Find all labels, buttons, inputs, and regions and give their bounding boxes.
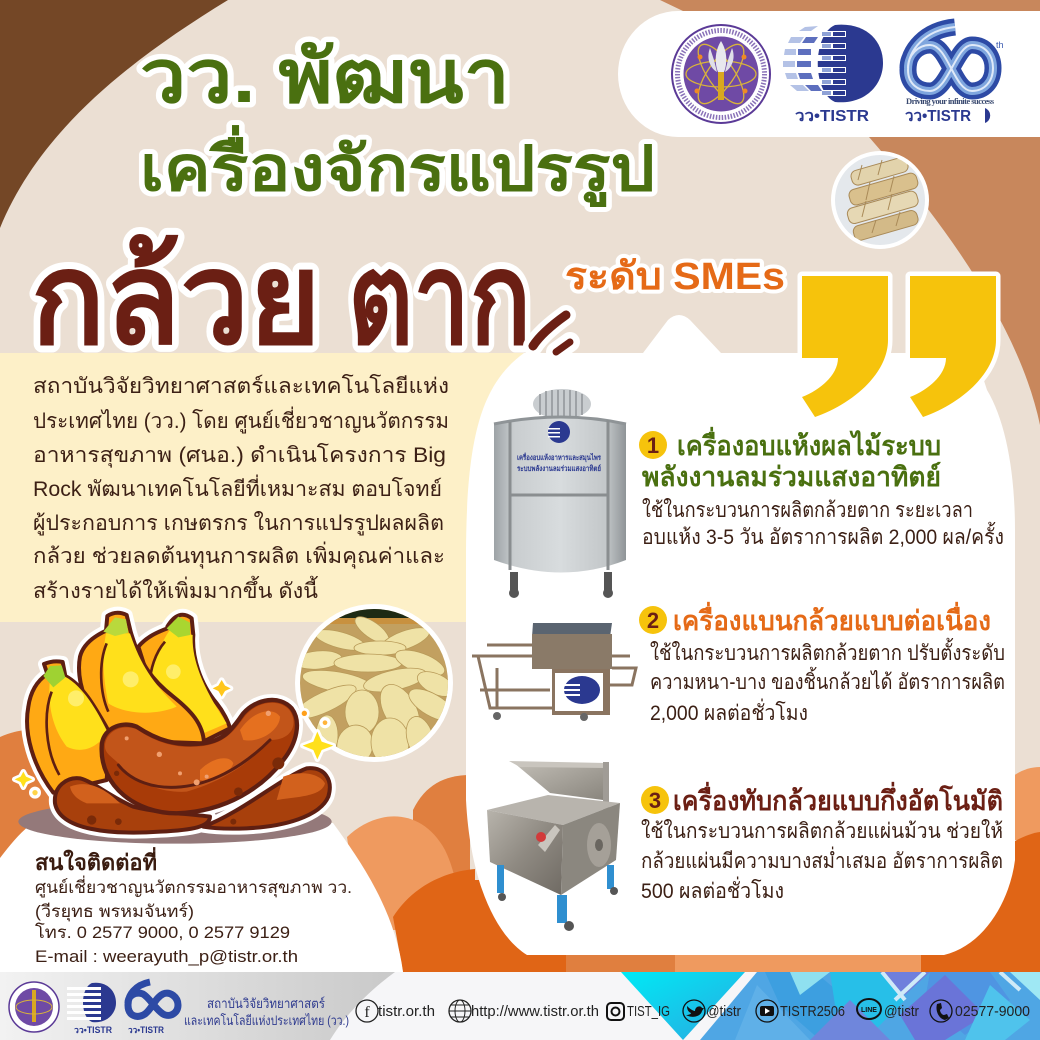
footer: website: http://www.tistr.or.th	[471, 1003, 599, 1020]
footer: line: LINE	[861, 1007, 877, 1014]
footer logo: 60th: วว•TISTR	[128, 1025, 164, 1035]
intro text: สถาบันวิจัยวิทยาศาสตร์และเทคโนโลยีแห่ง	[33, 374, 449, 398]
title main word: กล้วย	[31, 228, 321, 371]
footer logo: TISTR: วว•TISTR	[74, 1025, 112, 1035]
item 3 text: กล้วยแผ่นมีความบางสม่ำเสมอ อัตราการผลิต	[641, 846, 1003, 873]
title tail mark	[533, 315, 570, 352]
title line 1: วว. พัฒนา	[140, 35, 510, 118]
tan corner shape	[660, 0, 1040, 425]
item 2	[639, 601, 1005, 725]
white hill behind contact	[0, 823, 403, 972]
orange hills	[0, 730, 1040, 972]
badge 1: 1	[647, 433, 659, 458]
item 3	[641, 781, 1003, 903]
footer: twitter	[683, 1000, 741, 1022]
badge 1	[639, 431, 667, 459]
footer: line: @tistr	[884, 1003, 919, 1020]
footer: twitter: @tistr	[706, 1003, 741, 1020]
intro text: กล้วย ช่วยลดต้นทุนการผลิต เพิ่มคุณค่าและ	[33, 541, 445, 569]
illustration: bananas and dried bananas	[15, 613, 333, 844]
footer: facebook	[356, 1000, 435, 1022]
item 2 text	[650, 638, 1005, 725]
item 2 text: 2,000 ผลต่อชั่วโมง	[650, 698, 808, 725]
item 3 text	[641, 819, 1003, 903]
footer: website	[449, 1000, 599, 1022]
footer org name	[184, 996, 349, 1028]
contact block: (วีรยุทธ พรหมจันทร์)	[35, 902, 194, 922]
item 1	[639, 426, 1004, 549]
item 1 text	[642, 498, 1004, 549]
quote marks	[802, 276, 996, 417]
item 3 text: ใช้ในกระบวนการผลิตกล้วยแผ่นม้วน ช่วยให้	[641, 819, 1003, 843]
logo text: TISTR: วว•TISTR	[795, 108, 869, 125]
footer logo: seal	[9, 982, 59, 1032]
badge 2	[639, 606, 667, 634]
logo: ministry seal	[672, 25, 770, 123]
logo text: 60th: th	[996, 40, 1004, 50]
footer logo: 60th	[128, 982, 178, 1035]
main dried banana	[102, 700, 297, 813]
photo: dried bananas	[295, 604, 453, 762]
machine 1: solar dryer	[494, 389, 626, 598]
item 2 heading: เครื่องแบนกล้วยแบบต่อเนื่อง	[673, 601, 991, 636]
title main word	[31, 228, 531, 371]
intro text: ผู้ประกอบการ เกษตรกร ในการแปรรูปผลผลิต	[33, 511, 444, 536]
contact block: E-mail : weerayuth_p@tistr.or.th	[35, 947, 298, 966]
footer: line	[857, 999, 919, 1020]
logo icon: small disc	[985, 108, 990, 123]
brown corner shape	[0, 0, 228, 228]
footer: facebook: tistr.or.th	[378, 1003, 435, 1020]
title main word: ตาก	[348, 228, 531, 371]
intro text: อาหารสุขภาพ (ศนอ.) ดำเนินโครงการ Big	[33, 443, 446, 468]
white outline silhouette	[27, 613, 330, 833]
footer band	[0, 972, 1040, 1040]
machine 1: solar dryer: ระบบพลังงานลมร่วมแสงอาทิตย์	[517, 464, 601, 473]
logo panel	[618, 11, 1040, 137]
item 1 heading	[642, 426, 941, 492]
footer logo: TISTR	[67, 983, 116, 1035]
footer: phone	[930, 1000, 1030, 1022]
contact block	[35, 846, 352, 966]
badge 3: 3	[649, 788, 661, 813]
footer: youtube	[756, 1000, 845, 1022]
item 1 text: อบแห้ง 3-5 วัน อัตราการผลิต 2,000 ผล/ครั้ง	[642, 522, 1004, 549]
title line 1: วว. พัฒนา	[140, 35, 510, 118]
photo: banana rolls	[831, 151, 929, 249]
logo: TISTR disc	[783, 25, 883, 102]
badge 2: 2	[647, 608, 659, 633]
back bananas	[138, 615, 230, 743]
footer org name: สถาบันวิจัยวิทยาศาสตร์	[207, 996, 325, 1011]
shadow	[18, 800, 332, 844]
footer: youtube: TISTR2506	[780, 1003, 845, 1020]
logo text: slogan: Driving your infinite success	[906, 96, 995, 106]
machine 3: banana press	[487, 761, 620, 931]
footer: instagram	[607, 1003, 670, 1020]
badge 3	[641, 786, 669, 814]
subtitle SMEs: ระดับ SMEs	[565, 256, 785, 298]
contact block: ศูนย์เชี่ยวชาญนวัตกรรมอาหารสุขภาพ วว.	[35, 875, 352, 898]
title main word: ตาก	[348, 228, 531, 371]
title line 2: เครื่องจักรแปรรูป	[140, 125, 655, 207]
footer org name: และเทคโนโลยีแห่งประเทศไทย (วว.)	[184, 1013, 349, 1028]
contact block: สนใจติดต่อที่	[35, 846, 157, 875]
item 3 heading: เครื่องทับกล้วยแบบกึ่งอัตโนมัติ	[673, 781, 1003, 816]
subtitle SMEs: ระดับ SMEs	[565, 256, 785, 298]
logo: 60th anniversary	[908, 27, 993, 91]
lower dried bananas	[203, 768, 330, 829]
footer: facebook: f	[364, 1004, 370, 1021]
item 1 text: ใช้ในกระบวนการผลิตกล้วยตาก ระยะเวลา	[642, 498, 973, 522]
item 1 heading: เครื่องอบแห้งผลไม้ระบบ	[677, 426, 941, 461]
machine 1: solar dryer: เครื่องอบแห้งอาหารและสมุนไพร	[517, 451, 602, 462]
title main word: กล้วย	[31, 228, 321, 371]
logo text: TISTR 2: วว•TISTR	[905, 108, 971, 125]
intro text: ประเทศไทย (วว.) โดย ศูนย์เชี่ยวชาญนวัตกรรม	[33, 406, 449, 434]
intro text	[33, 374, 449, 603]
item 1 heading: พลังงานลมร่วมแสงอาทิตย์	[642, 461, 941, 492]
intro text: สร้างรายได้ให้เพิ่มมากขึ้น ดังนี้	[33, 576, 318, 603]
footer: phone: 02577-9000	[955, 1003, 1030, 1020]
sparkles	[15, 680, 333, 796]
intro text: Rock พัฒนาเทคโนโลยีที่เหมาะสม ตอบโจทย์	[33, 474, 442, 501]
machine 2: banana flattener	[472, 623, 636, 721]
title line 2: เครื่องจักรแปรรูป	[140, 125, 655, 207]
contact block: โทร. 0 2577 9000, 0 2577 9129	[35, 922, 290, 942]
main white panel	[466, 315, 1015, 955]
footer: instagram: TIST_IG	[627, 1003, 670, 1020]
item 3 text: 500 ผลต่อชั่วโมง	[641, 876, 784, 903]
yellow intro panel	[0, 353, 530, 622]
